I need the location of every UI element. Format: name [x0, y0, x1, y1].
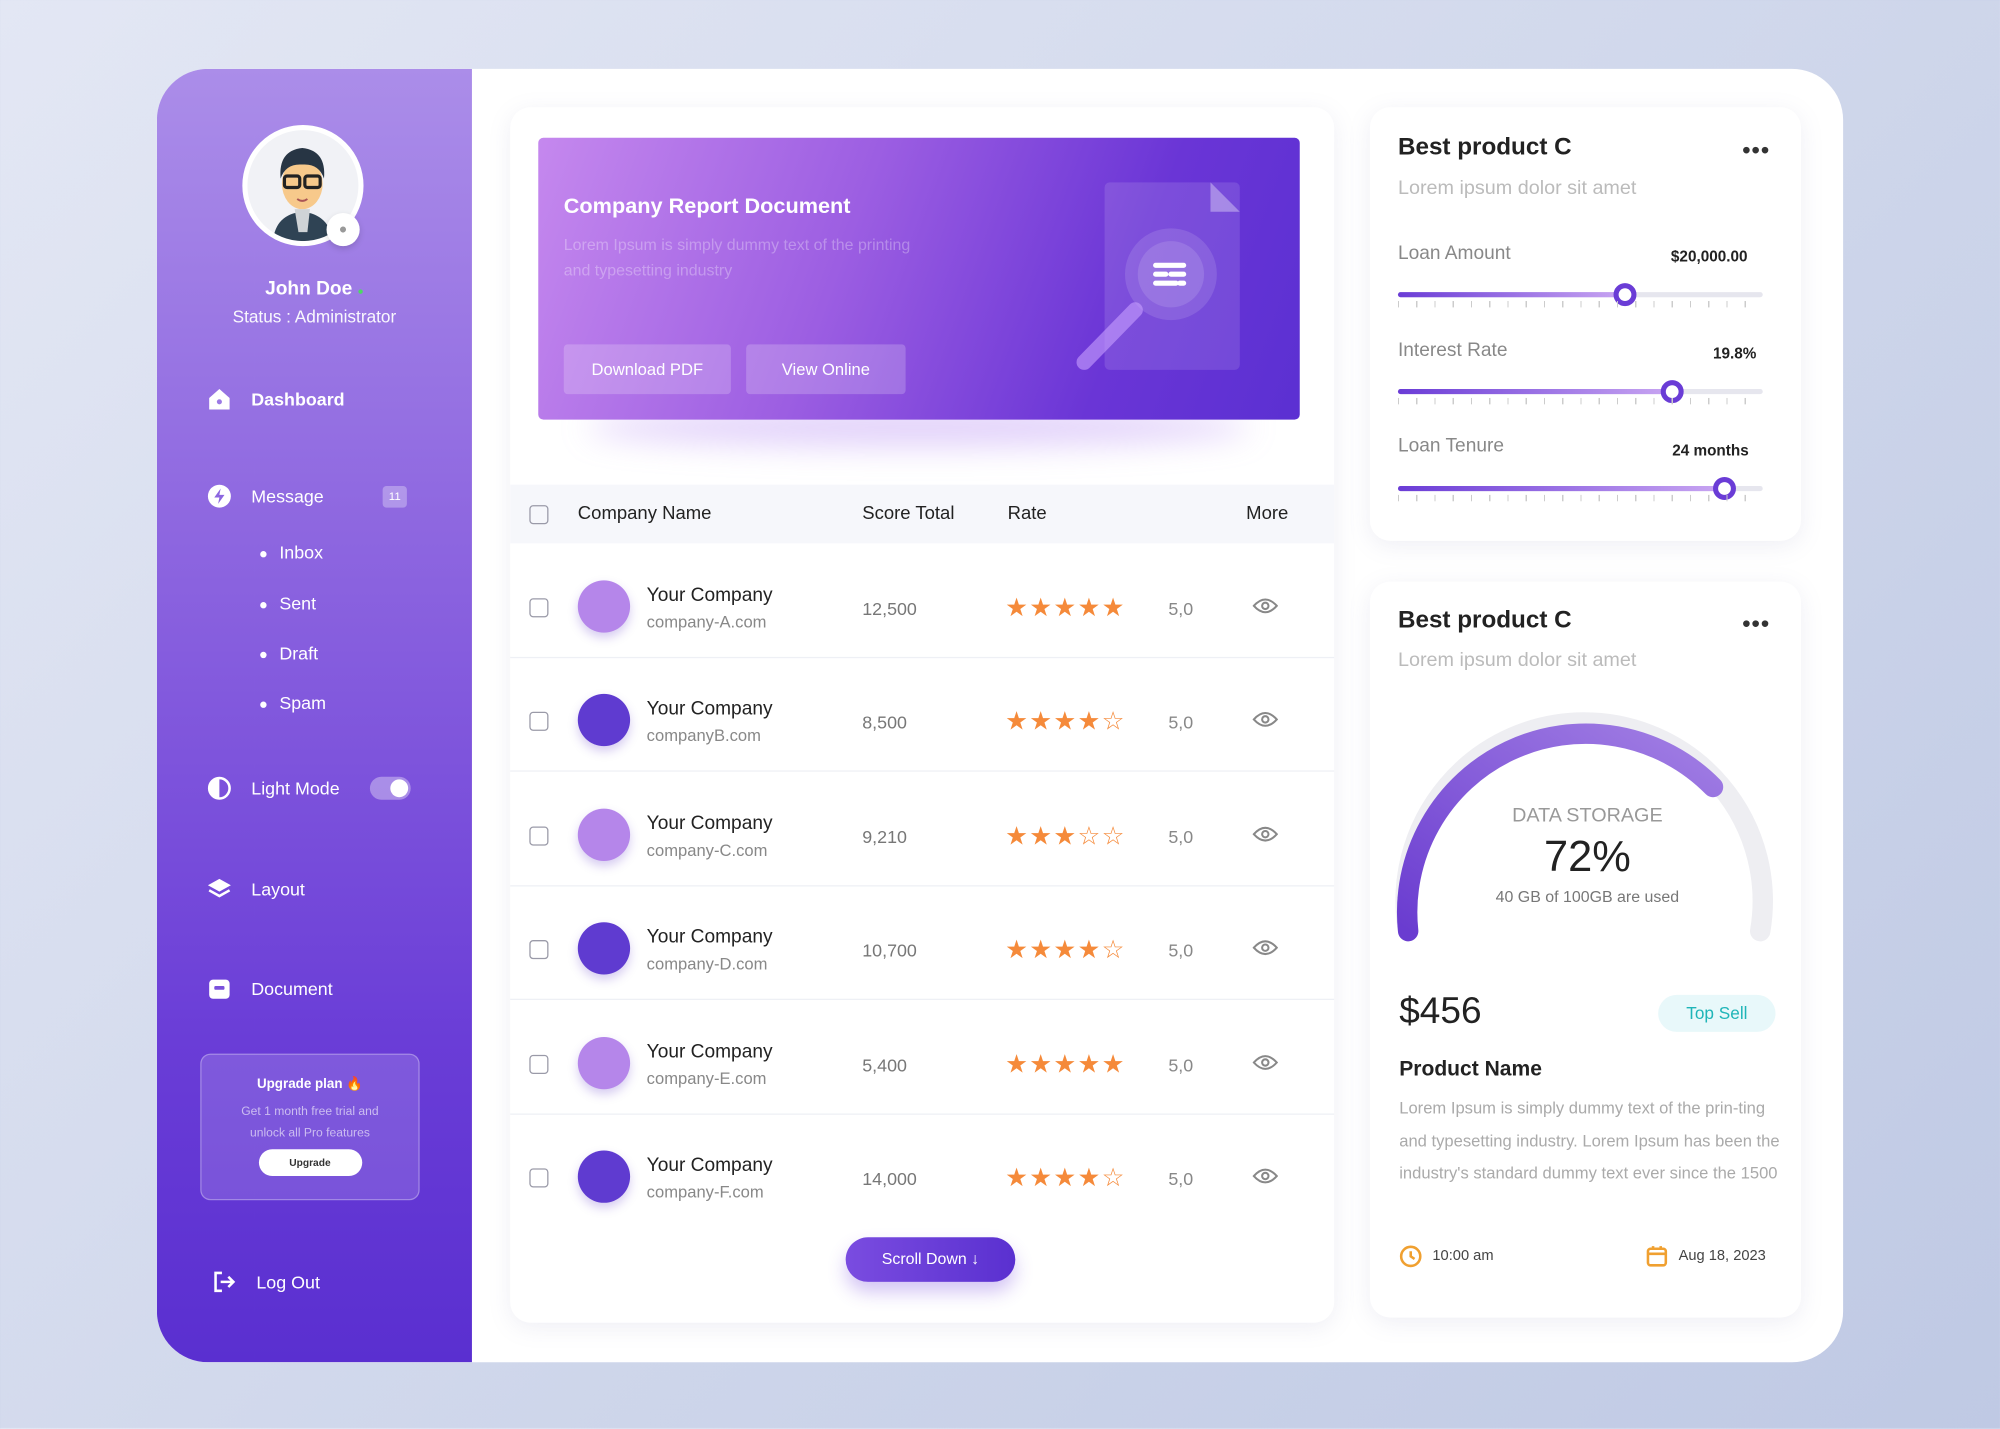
nav: light mode: Light Mode	[251, 778, 340, 798]
upgrade box	[200, 1054, 420, 1200]
text: Spam	[279, 693, 326, 713]
user name: John Doe ●	[265, 278, 364, 300]
text: Interest Rate	[1398, 339, 1508, 361]
table header: More	[1246, 504, 1288, 524]
nav: dashboard: Dashboard	[251, 389, 345, 409]
text: 5,0	[1168, 940, 1193, 960]
slider: loan amount	[161, 125, 1763, 1338]
text: company-C.com	[647, 841, 767, 860]
text: company-F.com	[647, 1182, 764, 1202]
tag: top sell: Top Sell	[1686, 1004, 1747, 1023]
scroll down button: Scroll Down ↓	[882, 1250, 979, 1268]
nav: document: Document	[251, 978, 333, 999]
table rows: Your Company	[647, 584, 773, 606]
table rows	[510, 545, 1334, 658]
nav: message: Message	[251, 486, 324, 506]
text: 8,500	[862, 712, 907, 732]
text: Your Company	[647, 698, 773, 719]
text: Best product C	[1398, 134, 1572, 161]
nav: layout	[208, 878, 305, 899]
text: Lorem Ipsum is simply dummy text of the prin-ting and typesetting industry. Lorem Ipsum has been the industry's standard dummy text ever since the 1500	[1399, 1098, 1780, 1182]
text: 10,700	[862, 940, 917, 960]
text: $20,000.00	[1671, 247, 1748, 265]
text: •••	[1742, 138, 1770, 163]
upgrade box: Get 1 month free trial and	[241, 1105, 379, 1119]
upgrade box: Upgrade plan 🔥	[257, 1077, 363, 1092]
scroll down button	[846, 1237, 1015, 1282]
gauge text: 40 GB of 100GB are used	[1496, 888, 1679, 906]
text: Your Company	[647, 1154, 773, 1176]
price: $456	[1399, 991, 1482, 1032]
text: 5,0	[1168, 1168, 1193, 1189]
table header: Rate	[1008, 504, 1047, 524]
text: •••	[1742, 611, 1770, 636]
text: Inbox	[279, 542, 323, 562]
text: Your Company	[647, 926, 773, 948]
user name	[233, 278, 396, 327]
banner: Lorem Ipsum is simply dummy text of the printing	[564, 236, 910, 254]
table header: Score Total	[862, 504, 954, 524]
text: 5,0	[1168, 827, 1193, 847]
gauge text	[1496, 805, 1679, 906]
banner: Company Report Document	[564, 194, 851, 218]
table rows: 12,500	[862, 598, 917, 619]
icon: document search	[1076, 182, 1240, 370]
user name: Status : Administrator	[233, 307, 396, 327]
upgrade box: Upgrade	[289, 1157, 331, 1168]
text: 5,0	[1168, 712, 1193, 732]
text: company-E.com	[647, 1069, 766, 1088]
text: ●	[339, 222, 347, 237]
tag: top sell	[1658, 995, 1776, 1032]
nav: light mode	[208, 776, 411, 800]
nav: layout: Layout	[251, 879, 305, 899]
panel: product	[1370, 582, 1801, 1318]
nav: message	[208, 484, 407, 508]
nav: document	[209, 978, 333, 999]
banner: Download PDF	[592, 360, 703, 379]
text: Loan Amount	[1398, 242, 1511, 264]
text: Draft	[279, 643, 318, 663]
product text: Product Name	[1399, 1057, 1542, 1080]
text: ★★★☆☆	[1005, 823, 1126, 851]
slider: loan tenure	[161, 125, 1763, 1338]
text: 24 months	[1672, 441, 1749, 459]
text: Loan Tenure	[1398, 435, 1504, 457]
text: Lorem ipsum dolor sit amet	[1398, 649, 1636, 671]
panel: loan sliders	[1370, 107, 1801, 541]
text: Your Company	[647, 1041, 773, 1062]
text: ★★★★☆	[1005, 708, 1126, 736]
text: 19.8%	[1713, 344, 1756, 362]
text: ★★★★☆	[1005, 1165, 1126, 1193]
banner: and typesetting industry	[564, 261, 732, 279]
text: 11	[389, 490, 401, 503]
nav: dashboard	[209, 389, 345, 410]
text: 5,0	[1168, 1055, 1193, 1075]
table header: Company Name	[578, 504, 711, 524]
sidebar	[157, 69, 472, 1362]
text: 14,000	[862, 1168, 917, 1189]
table rows: ★★★★★	[1005, 594, 1126, 622]
banner: View Online	[782, 360, 870, 379]
nav: log out	[214, 1272, 320, 1292]
gauge text: 72%	[1544, 833, 1631, 881]
text: ★★★★★	[1005, 1051, 1126, 1079]
date	[1646, 1246, 1766, 1267]
gauge text: DATA STORAGE	[1512, 805, 1663, 827]
text: company-D.com	[647, 954, 767, 973]
time	[1400, 1246, 1494, 1268]
table rows: 5,0	[1168, 598, 1193, 619]
upgrade box: unlock all Pro features	[250, 1126, 370, 1140]
slider: interest rate	[161, 125, 1763, 1338]
text: 9,210	[862, 827, 907, 847]
text: Your Company	[647, 812, 773, 834]
text: companyB.com	[647, 726, 761, 745]
text: Sent	[279, 593, 316, 614]
text: Best product C	[1398, 607, 1572, 634]
time: 10:00 am	[1432, 1249, 1494, 1264]
table header	[510, 485, 1334, 543]
panel: table	[510, 107, 1334, 1323]
gauge chart	[1396, 712, 1773, 942]
text: Lorem ipsum dolor sit amet	[1398, 177, 1636, 199]
table rows: company-A.com	[647, 612, 766, 631]
text: ★★★★☆	[1005, 936, 1126, 964]
date: Aug 18, 2023	[1679, 1249, 1766, 1264]
nav: log out: Log Out	[256, 1272, 320, 1292]
main card	[157, 69, 1843, 1362]
text: 5,400	[862, 1055, 907, 1075]
avatar	[242, 125, 364, 246]
banner shadow	[587, 408, 1250, 446]
banner	[538, 138, 1300, 420]
